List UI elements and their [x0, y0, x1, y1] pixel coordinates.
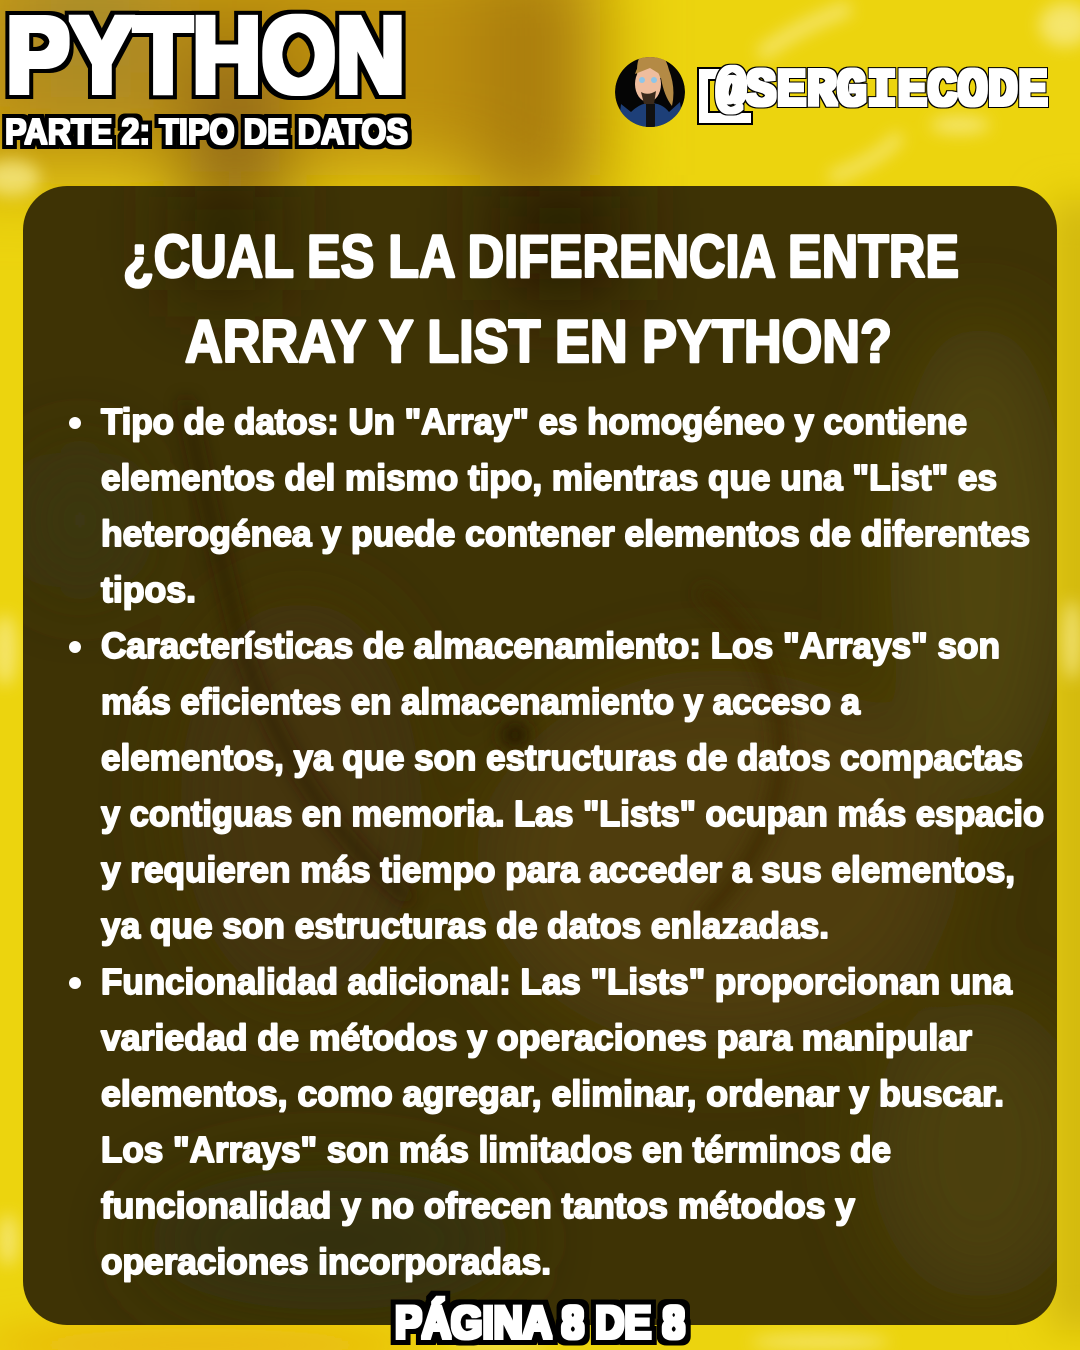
bullet list: almacenamiento: y requieren más tiempo para acceder a sus elementos,: [101, 849, 1015, 890]
bullet list: almacenamiento: Características de almacenamiento: Los "Arrays" son: [101, 625, 1000, 666]
bullet list: funcionalidad: variedad de métodos y operaciones para manipular: [101, 1017, 972, 1058]
bullet list: funcionalidad: funcionalidad y no ofrecen tantos métodos y: [101, 1185, 855, 1226]
logo text: @SERGIECODE: [716, 61, 1048, 121]
bullet list: funcionalidad: Los "Arrays" son más limitados en términos de: [101, 1129, 891, 1170]
bullet list: almacenamiento: elementos, ya que son estructuras de datos compactas: [101, 737, 1023, 778]
bullet list: tipo de datos: [69, 401, 1030, 610]
bullet list: almacenamiento: [69, 625, 1044, 946]
bullet list: funcionalidad: operaciones incorporadas.: [101, 1241, 551, 1282]
icon: avatar: [615, 57, 685, 127]
bullet list: almacenamiento: ya que son estructuras de datos enlazadas.: [101, 905, 829, 946]
bullet list: tipo de datos: heterogénea y puede contener elementos de diferentes: [101, 513, 1030, 554]
heading: question: ARRAY Y LIST EN PYTHON?: [185, 308, 892, 375]
bullet list: tipo de datos: Tipo de datos: Un "Array" es homogéneo y contiene: [101, 401, 967, 442]
bullet list: funcionalidad: [69, 961, 1013, 1282]
bullet list: tipo de datos: elementos del mismo tipo, mientras que una "List" es: [101, 457, 997, 498]
bullet list: tipo de datos: tipos.: [101, 569, 196, 610]
logo bracket: [698, 68, 752, 124]
bullet list: almacenamiento: y contiguas en memoria. Las "Lists" ocupan más espacio: [101, 793, 1044, 834]
page number: PÁGINA 8 DE 8: [395, 1297, 685, 1348]
subtitle: parte 2: PARTE 2: TIPO DE DATOS: [5, 111, 408, 152]
bullet list: funcionalidad: elementos, como agregar, eliminar, ordenar y buscar.: [101, 1073, 1004, 1114]
logo: @SERGIECODE: [698, 61, 1048, 124]
bullet list: funcionalidad: Funcionalidad adicional: Las "Lists" proporcionan una: [101, 961, 1013, 1002]
heading: question: [123, 223, 959, 375]
bullet list: almacenamiento: más eficientes en almacenamiento y acceso a: [101, 681, 861, 722]
